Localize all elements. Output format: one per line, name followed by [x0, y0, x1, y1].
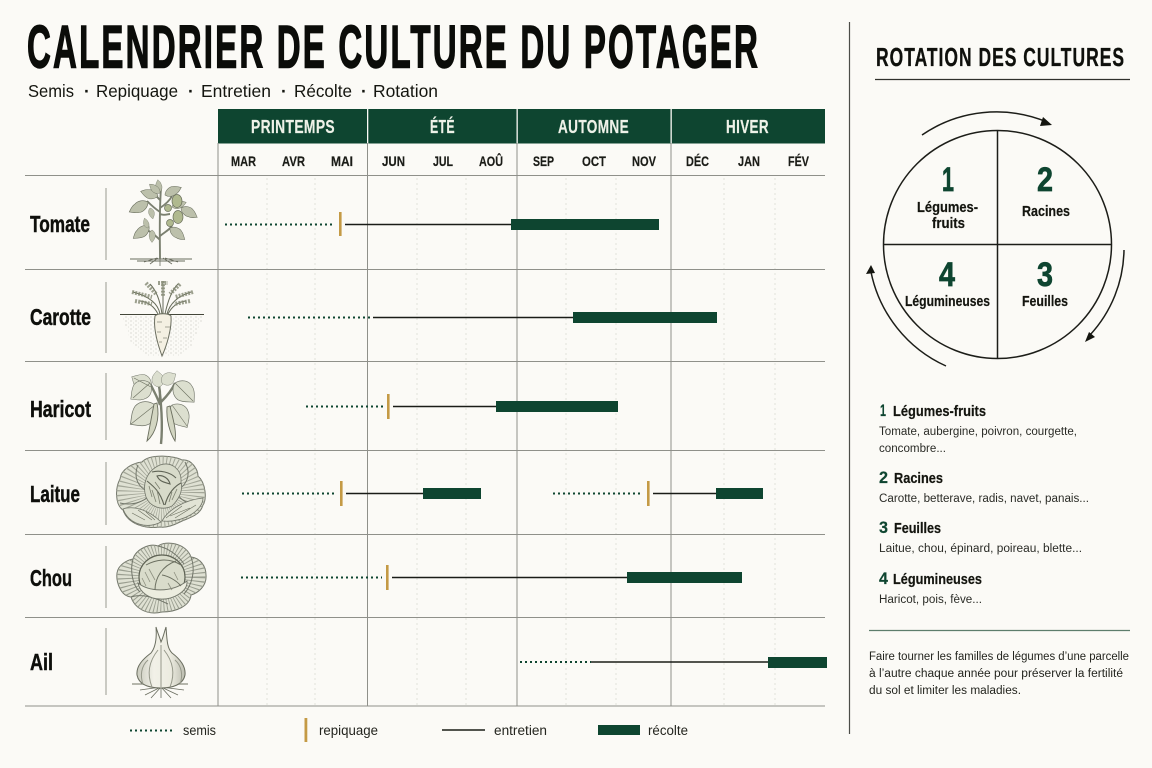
row: Ail	[30, 627, 188, 698]
rotation note: Faire tourner les familles de légumes d’une parcelle	[869, 651, 1129, 663]
row: Haricot	[30, 369, 201, 444]
segment 4: 4	[939, 256, 955, 294]
segment 1: 1	[942, 161, 954, 199]
legend: semis	[183, 723, 216, 738]
subtitle: ·	[281, 81, 287, 101]
month labels	[231, 152, 810, 169]
month labels: AVR	[282, 153, 305, 169]
crop name: Laitue	[30, 481, 80, 507]
row: Carotte	[30, 281, 204, 356]
season header band	[218, 109, 825, 144]
segment 2: 2	[1037, 161, 1053, 199]
month labels: JUN	[382, 153, 405, 169]
crop name: Chou	[30, 565, 72, 591]
legend: entretien	[494, 723, 547, 738]
subtitle: ·	[188, 81, 194, 101]
row: Laitue	[30, 456, 205, 527]
season header band: PRINTEMPS	[251, 117, 335, 137]
item 1	[879, 401, 1077, 455]
arrow: right	[1085, 250, 1124, 342]
subtitle: ·	[84, 81, 90, 101]
crop name: Carotte	[30, 304, 91, 330]
item 4: 4	[879, 569, 889, 588]
rotation wheel	[866, 112, 1124, 366]
item 2: Racines	[894, 471, 943, 487]
icon: bean plant	[123, 369, 201, 444]
season header band: ÉTÉ	[430, 116, 455, 137]
icon: garlic bulb	[132, 627, 188, 698]
subtitle: Rotation	[373, 81, 438, 101]
row: Tomate	[30, 179, 200, 266]
item 1: concombre...	[879, 443, 946, 455]
segment 2	[1022, 161, 1070, 220]
legend: repiquage	[319, 723, 378, 738]
item 2: Carotte, betterave, radis, navet, panais...	[879, 493, 1089, 505]
rotation note	[869, 651, 1129, 697]
subtitle: Repiquage	[96, 81, 178, 101]
item 1: 1	[880, 401, 886, 420]
item 2	[879, 468, 1089, 505]
item 4: Haricot, pois, fève...	[879, 594, 982, 606]
item 2: 2	[879, 468, 888, 487]
segment 3: Feuilles	[1022, 293, 1068, 310]
item 1: Tomate, aubergine, poivron, courgette,	[879, 426, 1077, 438]
month labels: NOV	[632, 153, 657, 169]
legend: récolte	[648, 723, 688, 738]
segment 4: Légumineuses	[905, 293, 990, 310]
gantt: Carotte	[248, 312, 717, 323]
rotation note: du sol et limiter les maladies.	[869, 685, 1021, 697]
subtitle	[28, 81, 438, 101]
subtitle: Entretien	[201, 81, 271, 101]
segment 1: Légumes-	[917, 199, 978, 216]
month labels: SEP	[533, 153, 554, 169]
icon: lettuce	[117, 456, 205, 527]
gantt: Haricot	[306, 394, 618, 419]
icon: carrot	[120, 281, 204, 356]
segment 1: fruits	[932, 215, 965, 232]
item 1: Légumes-fruits	[893, 404, 986, 420]
month labels: MAI	[331, 153, 353, 169]
gantt: Tomate	[225, 212, 659, 236]
crop name: Haricot	[30, 396, 91, 422]
item 3	[879, 518, 1082, 555]
season header band: AUTOMNE	[558, 117, 629, 137]
season header band: HIVER	[726, 117, 769, 137]
icon: cabbage	[117, 543, 206, 613]
crop name: Tomate	[30, 211, 90, 237]
arrow: left	[866, 265, 946, 366]
month labels: AOÛ	[479, 152, 503, 169]
gantt: Ail	[520, 657, 827, 668]
row: Chou	[30, 543, 206, 613]
subtitle: Semis	[28, 81, 74, 101]
gantt: Laitue	[242, 481, 763, 506]
item 4: Légumineuses	[893, 572, 982, 588]
panel: calendar chart	[25, 109, 827, 706]
segment 3: 3	[1037, 256, 1053, 294]
month labels: DÉC	[686, 153, 709, 169]
subtitle: ·	[361, 81, 367, 101]
segment 4	[905, 256, 990, 310]
segment 3	[1022, 256, 1068, 310]
month labels: MAR	[231, 153, 256, 169]
rotation note: à l’autre chaque année pour préserver la fertilité	[869, 668, 1123, 680]
month labels: JUL	[433, 153, 453, 169]
month labels: OCT	[582, 153, 606, 169]
item 4	[879, 569, 982, 606]
month labels: FÉV	[788, 153, 810, 169]
family list	[879, 401, 1089, 606]
subtitle: Récolte	[294, 81, 352, 101]
month labels: JAN	[738, 153, 760, 169]
item 3: Laitue, chou, épinard, poireau, blette...	[879, 543, 1082, 555]
item 3: Feuilles	[894, 521, 941, 537]
segment 2: Racines	[1022, 203, 1070, 220]
legend	[130, 718, 688, 742]
crop name: Ail	[30, 649, 53, 675]
arrow: top	[922, 112, 1052, 135]
segment 1	[917, 161, 978, 232]
icon: tomato plant	[127, 179, 200, 266]
gantt: Chou	[241, 565, 742, 590]
item 3: 3	[879, 518, 888, 537]
